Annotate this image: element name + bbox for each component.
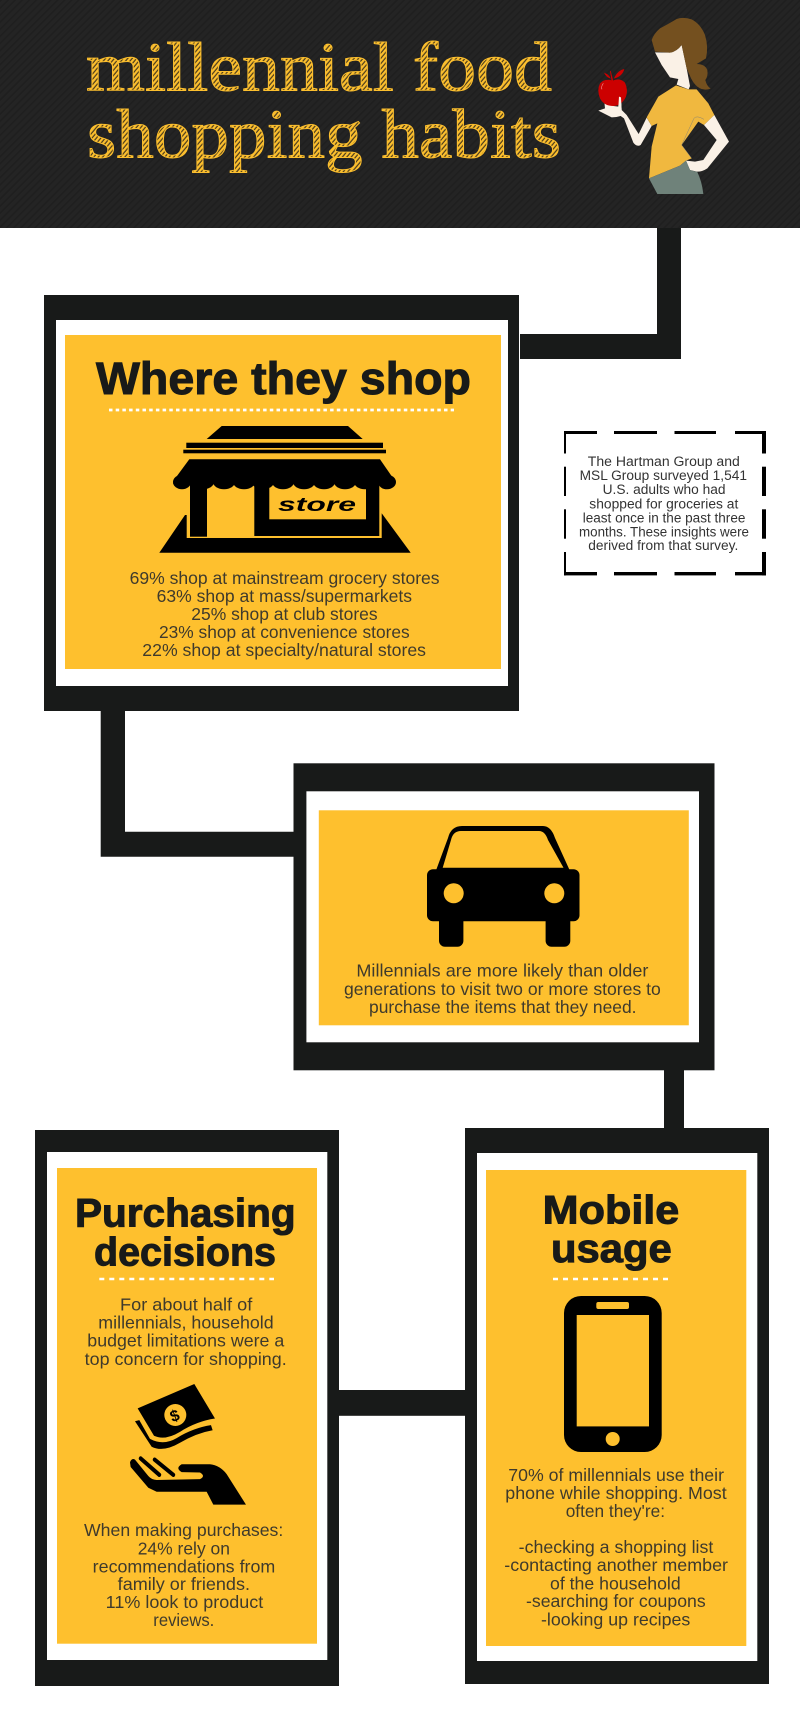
- text: mobile usage: 70% of millennials use their: [508, 1465, 724, 1485]
- survey text: months. These insights were: [579, 524, 749, 539]
- icon: money over hand: [130, 1384, 246, 1505]
- text: mobile usage: -contacting another member: [504, 1555, 728, 1575]
- stats: where they shop: 69% shop at mainstream grocery stores: [130, 568, 440, 588]
- callout: survey note: [564, 431, 766, 575]
- survey text: shopped for groceries at: [589, 496, 739, 511]
- stats: where they shop: 25% shop at club stores: [191, 604, 378, 624]
- survey text: least once in the past three: [583, 510, 745, 525]
- text: budget: budget limitations were a: [87, 1330, 285, 1350]
- text: purchase influences: [84, 1520, 283, 1630]
- text: mobile usage: phone while shopping. Most: [505, 1483, 727, 1503]
- connector: car panel to mobile panel: [664, 1070, 684, 1130]
- icon: money over hand: $: [168, 1407, 182, 1426]
- text: budget: For about half of: [120, 1294, 252, 1314]
- text: purchase influences: reviews.: [153, 1610, 214, 1630]
- text: budget: millennials, household: [98, 1312, 274, 1332]
- text: mobile usage: of the household: [550, 1573, 681, 1593]
- heading: where they shop: Where they shop: [96, 353, 471, 404]
- title: millennial food: [86, 30, 552, 107]
- heading: mobile usage: usage: [551, 1227, 672, 1271]
- dashed rule: [99, 1278, 274, 1280]
- heading: purchasing decisions: [75, 1192, 296, 1274]
- text: mobile usage: -searching for coupons: [526, 1591, 706, 1611]
- icon: store: store: [278, 495, 357, 516]
- survey text: MSL Group surveyed 1,541: [580, 468, 747, 483]
- text: multiple stores: Millennials are more likely than older: [356, 961, 649, 981]
- dashed rule: [553, 1278, 668, 1280]
- text: mobile usage: -checking a shopping list: [519, 1537, 713, 1557]
- connector: header to where they shop: [520, 228, 681, 359]
- stats: where they shop: 22% shop at specialty/natural stores: [142, 640, 426, 660]
- stats: where they shop: [130, 568, 440, 660]
- dashed rule: [109, 409, 454, 411]
- text: purchase influences: family or friends.: [118, 1574, 250, 1594]
- connector: where they shop to car panel: [101, 711, 294, 857]
- survey text: U.S. adults who had: [603, 482, 726, 497]
- text: purchase influences: 11% look to product: [106, 1592, 263, 1612]
- title: [86, 30, 561, 174]
- stats: where they shop: 63% shop at mass/supermarkets: [157, 586, 412, 606]
- header banner: [0, 0, 800, 228]
- heading: mobile usage: [543, 1188, 679, 1271]
- icon: store: [159, 426, 411, 553]
- text: mobile usage: [504, 1465, 728, 1629]
- stats: where they shop: 23% shop at convenience stores: [159, 622, 410, 642]
- panel: where they shop: [44, 295, 519, 711]
- connector: purchasing to mobile: [339, 1390, 465, 1416]
- text: mobile usage: often they're:: [566, 1501, 665, 1521]
- survey text: The Hartman Group and: [588, 454, 740, 469]
- text: multiple stores: [344, 961, 661, 1017]
- text: mobile usage: -looking up recipes: [541, 1609, 691, 1629]
- text: purchase influences: recommendations from: [93, 1556, 275, 1576]
- heading: purchasing decisions: Purchasing: [75, 1192, 296, 1236]
- text: multiple stores: generations to visit two or more stores to: [344, 979, 661, 999]
- survey text: [579, 454, 749, 553]
- panel: purchasing decisions: [35, 1130, 339, 1686]
- text: budget: top concern for shopping.: [85, 1349, 287, 1369]
- heading: purchasing decisions: decisions: [94, 1230, 276, 1274]
- illustration: woman holding apple: [598, 18, 729, 194]
- icon: smartphone: [564, 1296, 662, 1452]
- text: purchase influences: When making purchases:: [84, 1520, 283, 1540]
- text: multiple stores: purchase the items that they need.: [369, 997, 636, 1017]
- heading: mobile usage: Mobile: [543, 1188, 679, 1232]
- panel: mobile usage: [465, 1128, 769, 1684]
- survey text: derived from that survey.: [588, 538, 738, 553]
- panel: multiple stores: [294, 763, 714, 1070]
- title: shopping habits: [87, 97, 561, 174]
- icon: car: [427, 826, 580, 947]
- text: purchase influences: 24% rely on: [138, 1538, 230, 1558]
- text: budget: [85, 1294, 287, 1369]
